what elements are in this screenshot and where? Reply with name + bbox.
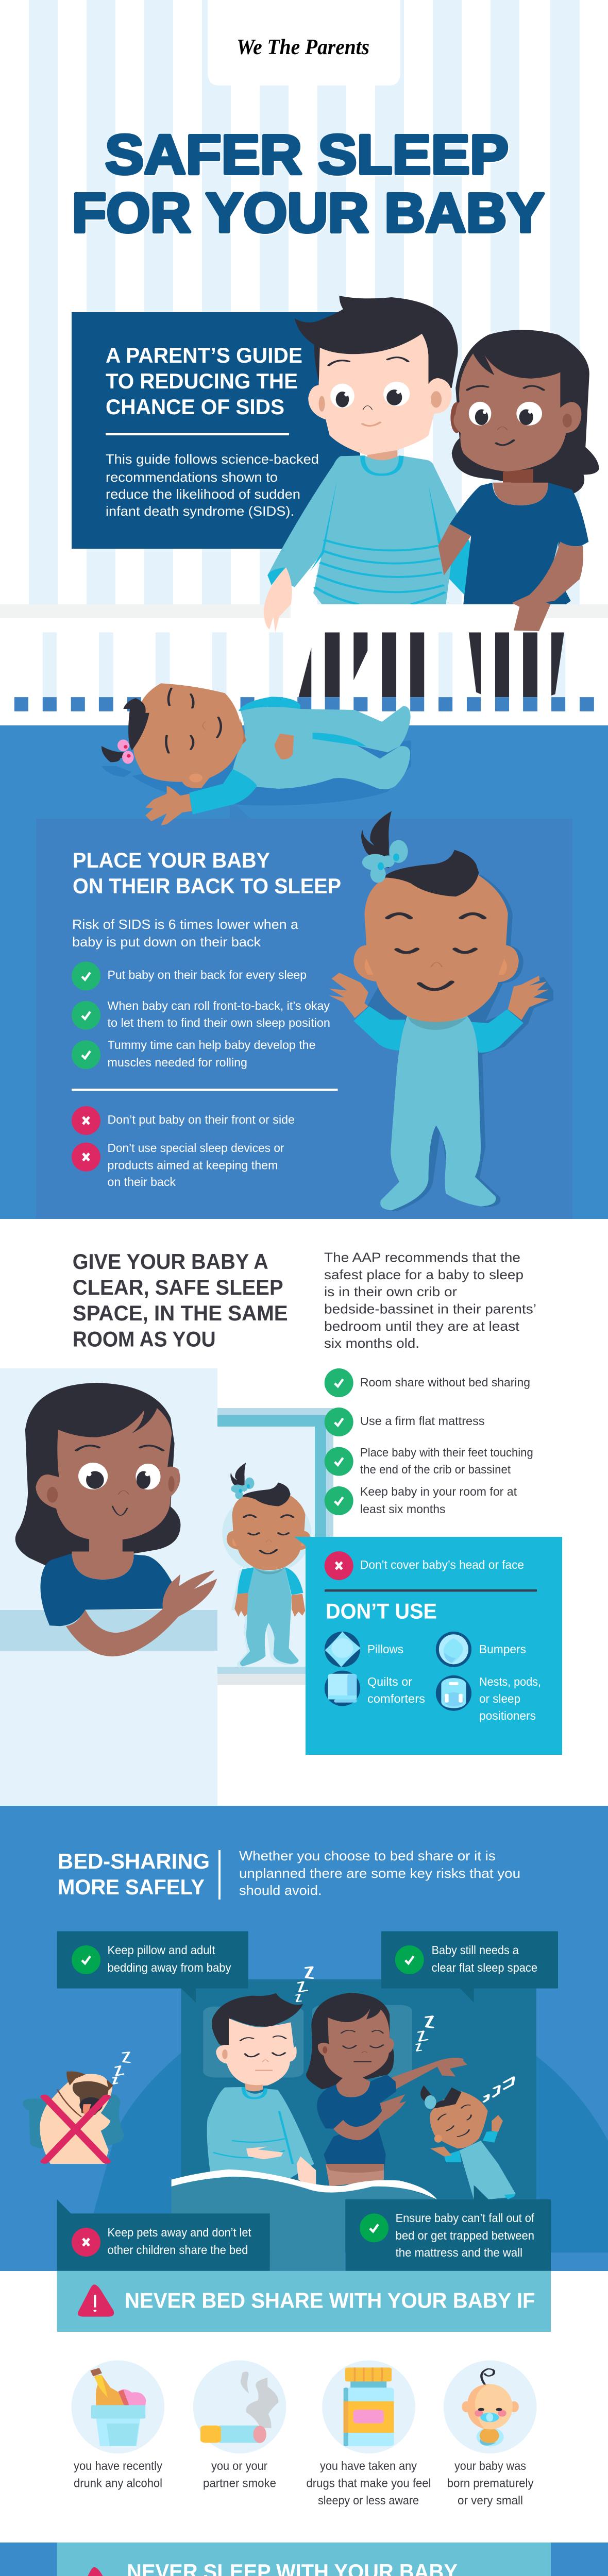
mother — [438, 330, 599, 604]
AAP paragraph — [324, 1250, 536, 1351]
banner: never bed share — [57, 2271, 551, 2332]
callout: pets and children — [57, 2213, 270, 2271]
checklist: Room share without bed sharing — [360, 1376, 530, 1389]
do list: to let them to find their own sleep position — [107, 1016, 330, 1029]
don't list: Don’t put baby on their front or side — [107, 1113, 295, 1126]
labels: positioners — [479, 1709, 536, 1722]
section intro: should avoid. — [239, 1883, 322, 1898]
panel: never sleep on a couch — [0, 2543, 608, 2576]
parents' hands on rail — [264, 567, 551, 633]
section heading: GIVE YOUR BABY A — [73, 1249, 268, 1274]
labels: Nests, pods, — [479, 1675, 541, 1688]
do list: Put baby on their back for every sleep — [107, 968, 307, 981]
father's hand — [297, 2157, 316, 2185]
background stripes — [29, 0, 580, 604]
don't list: on their back — [107, 1175, 176, 1189]
AAP paragraph: safest place for a baby to sleep — [324, 1267, 523, 1282]
section intro: unplanned there are some key risks that you — [239, 1866, 520, 1881]
intro text: reduce the likelihood of sudden — [106, 486, 300, 502]
callout: pillow and bedding: Keep pillow and adult — [107, 1943, 215, 1957]
illustration: blanket — [57, 2170, 488, 2271]
checklist: Place baby with their feet touching — [360, 1446, 533, 1459]
text: never bed share reasons: partner smoke — [203, 2477, 276, 2490]
baby — [420, 2086, 516, 2199]
section heading: ON THEIR BACK TO SLEEP — [73, 874, 341, 898]
text: never bed share reasons: or very small — [458, 2494, 523, 2507]
section intro — [239, 1848, 520, 1898]
parents' legs through bars — [298, 633, 564, 697]
section heading — [58, 1849, 210, 1899]
checklist: least six months — [360, 1502, 446, 1516]
labels: or sleep — [479, 1692, 520, 1705]
icon: cigarette — [193, 2361, 286, 2453]
text: never bed share reasons — [74, 2459, 534, 2507]
text: never bed share reasons: born prematurely — [447, 2477, 534, 2490]
AAP paragraph: The AAP recommends that the — [324, 1250, 520, 1265]
intro text — [106, 451, 319, 519]
callout: pets and children: Keep pets away and don’t let — [107, 2226, 251, 2239]
crib rail — [0, 604, 608, 618]
banner — [57, 2543, 551, 2576]
intro text: infant death syndrome (SIDS). — [106, 503, 294, 519]
logo card: We The Parents — [237, 36, 369, 59]
sleeping Zs — [296, 1967, 514, 2102]
callout: pillow and bedding — [57, 1931, 248, 2003]
intro heading: CHANCE OF SIDS — [106, 395, 284, 419]
intro heading: A PARENT’S GUIDE — [106, 343, 302, 367]
title: FOR YOUR BABY — [72, 181, 544, 244]
callout: clear flat sleep space: clear flat sleep space — [432, 1961, 537, 1974]
section heading: BED-SHARING — [58, 1849, 210, 1873]
panel: clear safe sleep space — [0, 1249, 562, 1806]
illustration: small baby in crib — [222, 1463, 311, 1668]
callout: baby can't fall: the mattress and the wall — [396, 2246, 522, 2259]
callout: clear flat sleep space: Baby still needs a — [432, 1943, 519, 1957]
do list — [72, 961, 330, 1069]
labels: Quilts or — [367, 1675, 412, 1688]
callout: pillow and bedding: bedding away from baby — [107, 1961, 231, 1974]
text: never bed share reasons: drugs that make you feel — [306, 2477, 431, 2490]
callout: baby can't fall — [345, 2199, 551, 2271]
do list: muscles needed for rolling — [107, 1056, 247, 1069]
text: never bed share reasons: you have recently — [74, 2459, 162, 2472]
text: never bed share reasons: drunk any alcohol — [74, 2477, 162, 2490]
don't list: Don’t use special sleep devices or — [107, 1141, 284, 1155]
checklist: Use a firm flat mattress — [360, 1414, 485, 1428]
intro text: This guide follows science-backed — [106, 451, 319, 467]
labels: comforters — [367, 1692, 425, 1705]
illustration: baby standing — [329, 811, 553, 1211]
room backdrop — [0, 1368, 333, 1806]
labels — [367, 1642, 541, 1722]
panel: parent's guide intro — [72, 312, 360, 549]
illustration: mother — [15, 1383, 217, 1656]
illustration: parents at crib — [267, 296, 599, 604]
section heading: SPACE, IN THE SAME — [73, 1301, 288, 1325]
labels: Pillows — [367, 1642, 403, 1656]
callout: clear flat sleep space — [381, 1931, 558, 2003]
do list: When baby can roll front-to-back, it’s okay — [107, 999, 330, 1012]
do list: Tummy time can help baby develop the — [107, 1038, 315, 1052]
section intro: Whether you choose to bed share or it is — [239, 1848, 496, 1863]
icon: medicine bottle — [322, 2361, 415, 2453]
section heading: CLEAR, SAFE SLEEP — [73, 1275, 283, 1299]
section intro — [72, 917, 299, 950]
icon: alcohol — [71, 2361, 164, 2453]
crib bars — [14, 633, 594, 711]
icon: small baby — [444, 2361, 536, 2453]
title: SAFER SLEEP — [105, 123, 509, 185]
section heading: MORE SAFELY — [58, 1875, 205, 1899]
section heading — [73, 848, 341, 898]
callout: baby can't fall: bed or get trapped between — [396, 2229, 534, 2242]
banner: never bed share: NEVER BED SHARE WITH YOUR BABY IF — [125, 2288, 535, 2312]
illustration: family in bed — [23, 1967, 608, 2252]
labels: Bumpers — [479, 1642, 526, 1656]
checklist: the end of the crib or bassinet — [360, 1463, 511, 1476]
don't list — [72, 1106, 295, 1189]
don't use heading: DON’T USE — [326, 1599, 437, 1623]
callout: pets and children: other children share the bed — [107, 2243, 248, 2257]
text: never bed share reasons: your baby was — [454, 2459, 526, 2472]
panel: bed-sharing more safely — [0, 1806, 608, 2271]
section heading: ROOM AS YOU — [73, 1327, 216, 1351]
icon: warning triangle — [78, 2284, 114, 2317]
section intro: baby is put down on their back — [72, 934, 261, 950]
intro heading — [106, 343, 302, 419]
logo card — [208, 0, 400, 86]
AAP paragraph: bedside-bassinet in their parents’ — [324, 1301, 536, 1317]
text: never bed share reasons: sleepy or less aware — [318, 2494, 419, 2507]
mother — [306, 1993, 467, 2187]
title — [72, 123, 544, 244]
AAP paragraph: bedroom until they are at least — [324, 1318, 520, 1334]
intro text: recommendations shown to — [106, 469, 278, 485]
pug with red cross — [23, 2052, 129, 2164]
section intro: Risk of SIDS is 6 times lower when a — [72, 917, 299, 932]
panel: place your baby on their back — [72, 848, 341, 1189]
boy — [267, 296, 472, 604]
illustration: baby lying down — [102, 683, 411, 825]
checklist: Keep baby in your room for at — [360, 1485, 517, 1498]
icons: never bed share reasons — [71, 2361, 536, 2453]
checklist — [325, 1368, 533, 1516]
icons: pillow, bumper, quilt, nest — [325, 1632, 471, 1711]
panel: don't use: Don’t cover baby’s head or face — [360, 1558, 524, 1571]
intro heading: TO REDUCING THE — [106, 369, 298, 393]
don't list: products aimed at keeping them — [107, 1159, 278, 1172]
panel: back to sleep background — [0, 725, 608, 1219]
text: never bed share reasons: you or your — [211, 2459, 267, 2472]
AAP paragraph: six months old. — [324, 1335, 419, 1351]
section heading: PLACE YOUR BABY — [73, 848, 270, 872]
panel: don't use — [294, 1537, 562, 1755]
panel: header with stripes — [29, 0, 580, 604]
text: never bed share reasons: you have taken any — [320, 2459, 417, 2472]
callout: baby can't fall: Ensure baby can’t fall out of — [396, 2211, 535, 2225]
father — [207, 1993, 314, 2180]
AAP paragraph: is in their own crib or — [324, 1284, 457, 1299]
section heading — [73, 1249, 288, 1351]
